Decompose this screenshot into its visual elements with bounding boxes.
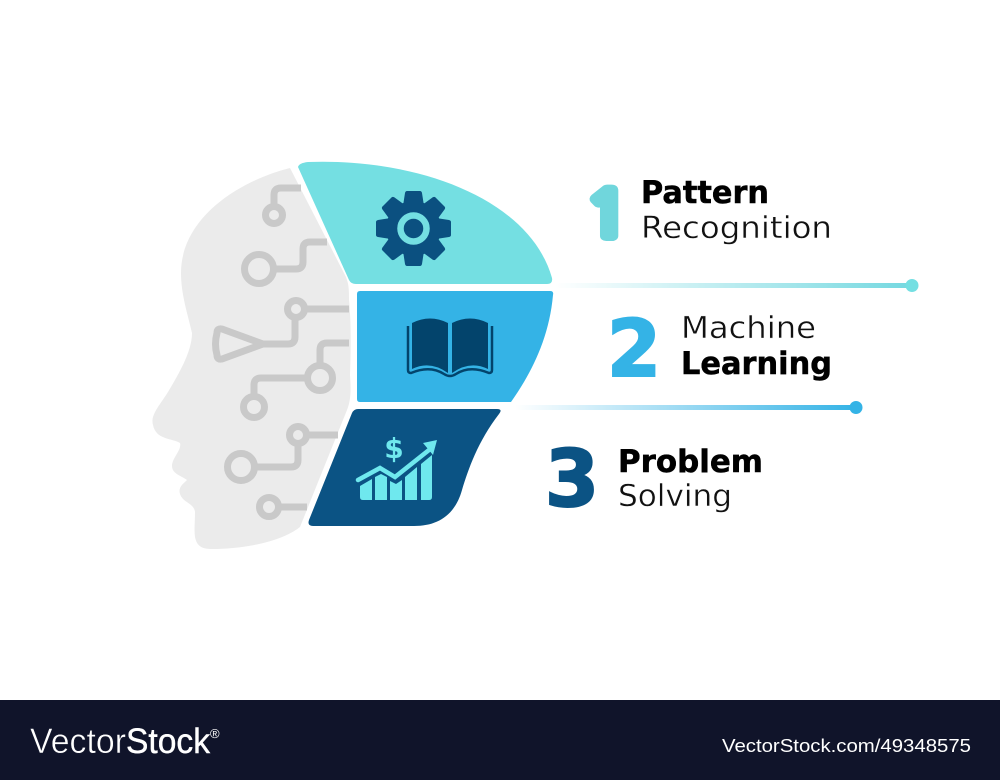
circuit traces [216, 188, 349, 516]
head silhouette [152, 168, 351, 549]
connector line 1 [555, 279, 918, 292]
item 1: Pattern Recognition: Recognition [641, 211, 832, 246]
numeral 3: 3 [545, 435, 599, 525]
segment 3: navy brain section [308, 409, 501, 526]
brand logo text: Stock [126, 722, 210, 761]
numeral 2: 2 [607, 305, 661, 395]
icon: gear [376, 191, 451, 266]
label: Pattern [641, 175, 769, 211]
item 1: Pattern Recognition [586, 175, 832, 246]
numeral 1: 1 [586, 186, 630, 246]
head silhouette with circuit [152, 168, 351, 549]
icon: open book [408, 318, 492, 376]
footer bar: ® [210, 726, 220, 741]
label: Machine [681, 311, 816, 346]
item 2: Machine Learning [607, 305, 832, 395]
item 2: Machine Learning: Learning [681, 346, 832, 382]
connector line 2 [515, 401, 862, 414]
item 3: Problem Solving: Solving [618, 479, 732, 514]
label: Problem [618, 444, 763, 480]
footer bar [0, 700, 1000, 780]
brand logo text: Vector [30, 722, 126, 761]
dollar sign: $ [384, 432, 404, 465]
icon: growth chart with dollar [358, 432, 437, 500]
segment 2: blue brain section [357, 291, 553, 402]
item 3: Problem Solving [545, 435, 763, 525]
segment 1: teal brain section [298, 162, 552, 284]
stock image id: VectorStock.com/49348575 [722, 735, 971, 756]
brand logo text [30, 722, 210, 761]
